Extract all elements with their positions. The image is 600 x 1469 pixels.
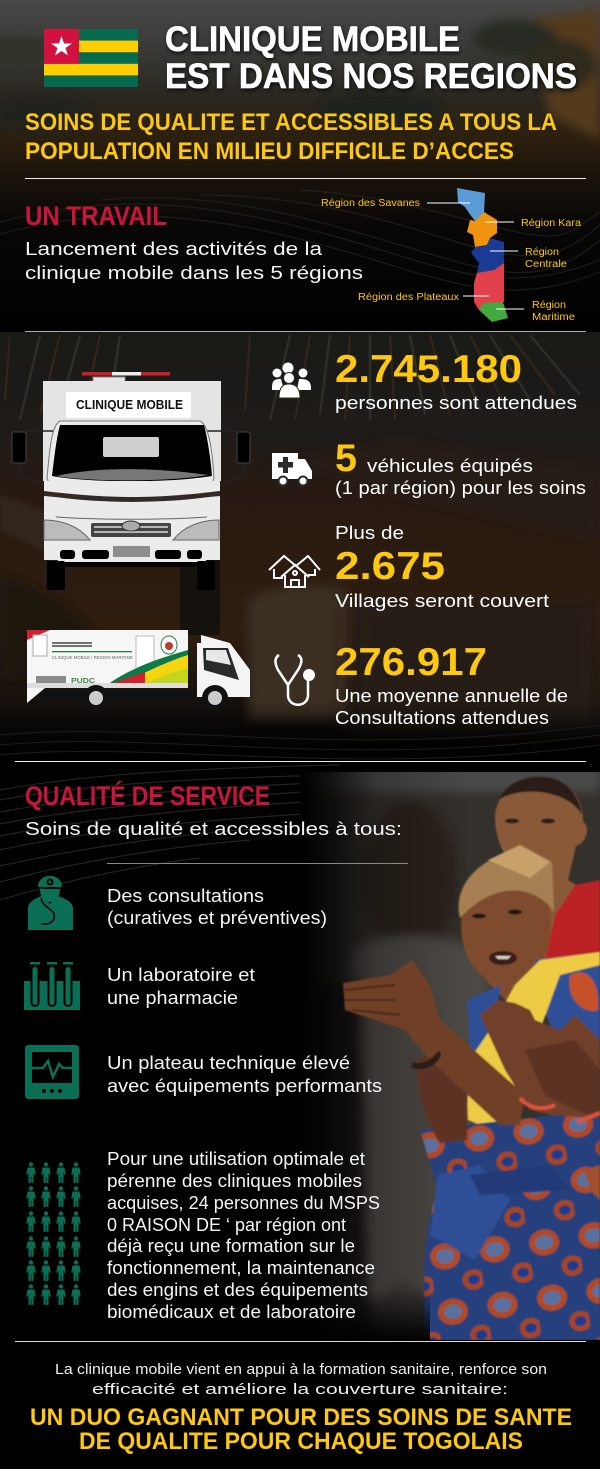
stat: vehicles <box>335 437 586 498</box>
stat: villages: Plus de <box>335 523 404 543</box>
map region: Savanes <box>457 188 485 221</box>
footer headline: UN DUO GAGNANT POUR DES SOINS DE SANTE <box>30 1404 572 1431</box>
icon: ambulance <box>272 453 312 486</box>
text: plateau technique: avec équipements performants <box>107 1076 382 1096</box>
stat: consultations: Consultations attendues <box>335 708 549 728</box>
text: laboratoire <box>107 965 255 1008</box>
illustration: truck side view: CLINIQUE MOBILE / REGION MARITIME <box>52 655 133 660</box>
subtitle: POPULATION EN MILIEU DIFFICILE D’ACCES <box>25 138 514 165</box>
text: soins de qualité: Soins de qualité et accessibles à tous: <box>25 819 402 839</box>
background: landscape photo header <box>0 0 600 332</box>
text: training paragraph: Pour une utilisation optimale et <box>107 1149 365 1169</box>
background: village photo middle <box>0 332 600 762</box>
stat: persons expected: 2.745.180 <box>335 348 522 391</box>
stat: persons expected <box>335 348 577 413</box>
map: Togo regions <box>321 188 581 323</box>
footer headline <box>30 1404 572 1455</box>
text: training paragraph: biomédicaux et de laboratoire <box>107 1302 356 1322</box>
footer text: efficacité et améliore la couverture sanitaire: <box>92 1381 508 1398</box>
map: Togo regions: Région des Plateaux <box>358 292 459 303</box>
icon: monitor <box>25 1045 79 1099</box>
title <box>165 20 577 96</box>
text: lancement des activités <box>25 239 363 283</box>
text: consultations <box>107 886 327 928</box>
icon: test tubes <box>24 962 80 1010</box>
stat: consultations: Une moyenne annuelle de <box>335 686 568 706</box>
text: consultations: (curatives et préventives) <box>107 908 327 928</box>
stat: vehicles: 5 <box>335 437 357 480</box>
text: training paragraph <box>107 1149 380 1322</box>
map region: Kara <box>467 212 497 247</box>
map region: Plateaux <box>474 263 504 310</box>
footer text: La clinique mobile vient en appui à la formation sanitaire, renforce son <box>55 1361 547 1378</box>
subtitle <box>25 109 557 165</box>
text: training paragraph: 0 RAISON DE ‘ par région ont <box>107 1215 346 1235</box>
text: plateau technique: Un plateau technique élevé <box>107 1053 350 1073</box>
icon: Togo flag <box>44 29 138 87</box>
text: training paragraph: pérenne des cliniques mobiles <box>107 1171 362 1191</box>
icon: group of people <box>272 362 311 398</box>
text: training paragraph: fonctionnement, la maintenance <box>107 1258 375 1278</box>
text: lancement des activités: Lancement des activités de la <box>25 239 323 259</box>
map: Togo regions: Région <box>525 247 559 258</box>
icon: doctor <box>28 876 73 930</box>
map region: Maritime <box>479 302 508 322</box>
footer headline: DE QUALITE POUR CHAQUE TOGOLAIS <box>79 1428 523 1455</box>
background: lower section with photo of women <box>0 762 600 1352</box>
map: Togo regions: Maritime <box>532 312 575 323</box>
map: Togo regions: Région des Savanes <box>321 198 420 209</box>
illustration: truck front view: CLINIQUE MOBILE <box>76 398 183 412</box>
map: Togo regions: Région Kara <box>521 218 581 229</box>
icon grid: 24 trained staff <box>26 1162 81 1305</box>
text: training paragraph: acquises, 24 personnes du MSPS <box>107 1193 380 1213</box>
text: laboratoire: une pharmacie <box>107 988 238 1008</box>
stat: villages: 2.675 <box>335 545 445 588</box>
text: consultations: Des consultations <box>107 886 264 906</box>
title: CLINIQUE MOBILE <box>165 20 460 59</box>
stat: villages: Villages seront couvert <box>335 591 549 611</box>
photo: woman applauding with young man <box>280 762 600 1352</box>
text: training paragraph: des engins et des équipements <box>107 1280 368 1300</box>
stat: vehicles: (1 par région) pour les soins <box>335 478 586 498</box>
illustration: truck front view <box>12 372 250 590</box>
text: plateau technique <box>107 1053 382 1096</box>
stat: vehicles: véhicules équipés <box>367 456 533 476</box>
text: laboratoire: Un laboratoire et <box>107 965 255 985</box>
text: lancement des activités: clinique mobile dans les 5 régions <box>25 263 363 283</box>
heading: qualité de service: QUALITÉ DE SERVICE <box>25 780 270 811</box>
stat: persons expected: personnes sont attendues <box>335 393 577 413</box>
stat: villages <box>335 523 549 611</box>
map region: Centrale <box>471 238 504 273</box>
footer text <box>55 1361 547 1398</box>
illustration: truck side view <box>27 630 250 711</box>
icon: village houses <box>269 556 320 587</box>
illustration: truck side view: PUDC <box>71 678 95 685</box>
subtitle: SOINS DE QUALITE ET ACCESSIBLES A TOUS LA <box>25 109 557 136</box>
stat: consultations <box>335 641 568 728</box>
map: Togo regions: Région <box>532 300 566 311</box>
text: training paragraph: déjà reçu une formation sur le <box>107 1236 355 1256</box>
map: Togo regions: Centrale <box>525 259 567 270</box>
title: EST DANS NOS REGIONS <box>165 57 577 96</box>
heading: un travail: UN TRAVAIL <box>25 201 167 231</box>
stat: consultations: 276.917 <box>335 641 487 684</box>
icon: stethoscope <box>276 655 315 705</box>
